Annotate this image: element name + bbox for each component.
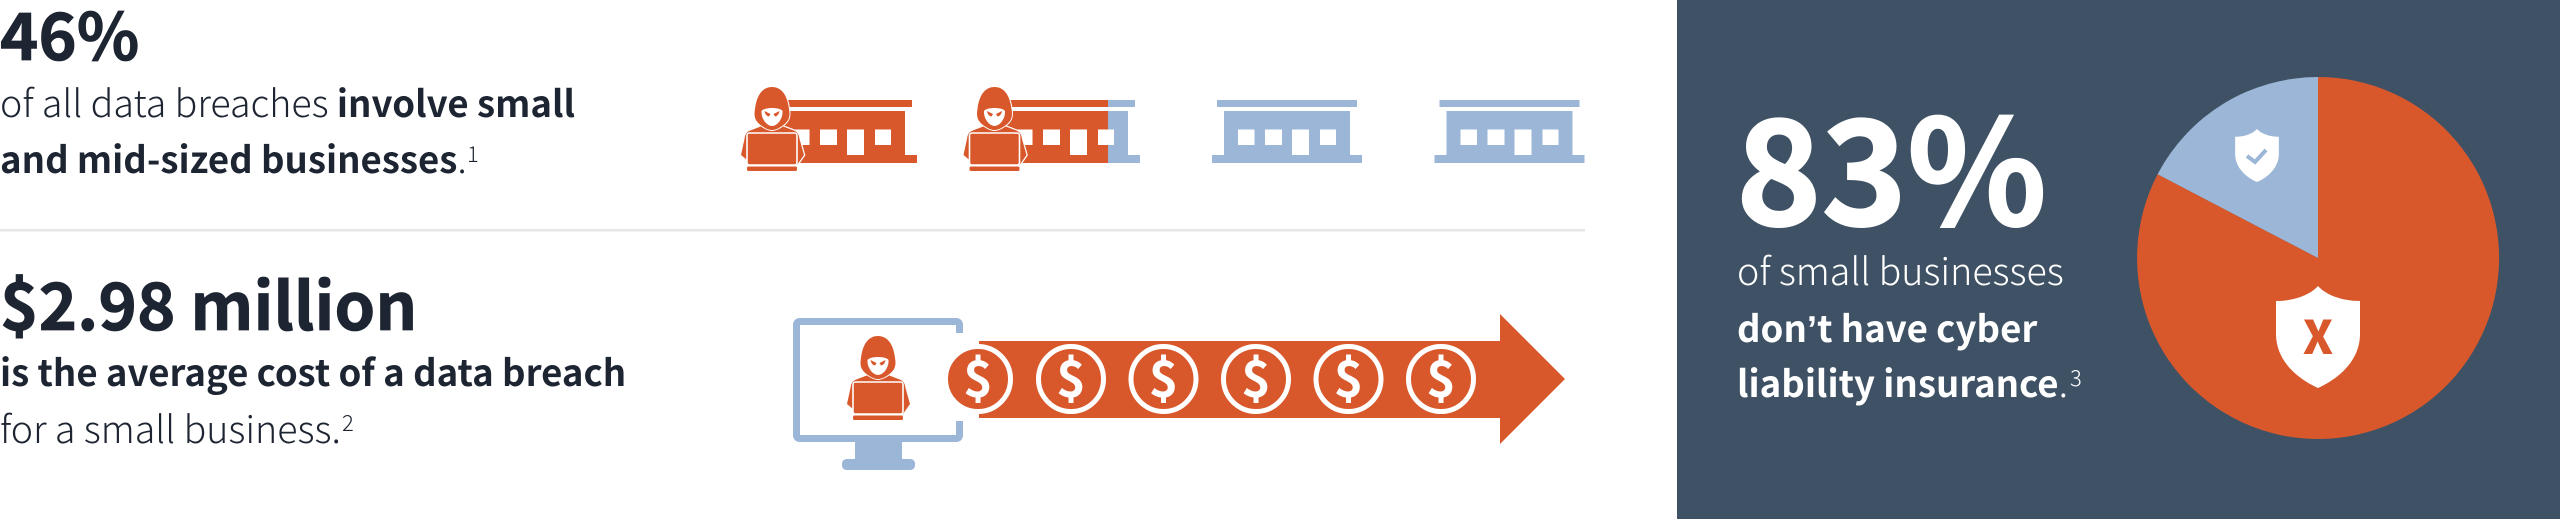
divider — [0, 229, 1585, 232]
text: small business: for a small business. — [0, 399, 341, 454]
coin 1: $ — [963, 340, 993, 412]
icon: shield with x — [2276, 286, 2360, 388]
pie slice: insured 17% — [2158, 77, 2318, 258]
coin 3 — [1131, 340, 1196, 412]
icon: hacker on screen — [847, 336, 910, 420]
icon: breached building 1 — [741, 87, 917, 171]
text: don't have cyber: don’t have cyber — [1737, 300, 2037, 353]
pie chart — [2137, 77, 2499, 439]
coin 4 — [1224, 340, 1288, 412]
text: liability insurance: liability insurance. — [1737, 353, 2068, 408]
coin 2 — [1038, 340, 1104, 412]
text: breach description: of all data breaches involve small — [0, 73, 575, 128]
coin 6: $ — [1426, 340, 1456, 412]
icon: shield with check — [2235, 129, 2279, 182]
coin 5: $ — [1334, 340, 1363, 412]
text: of small businesses: of small businesses — [1737, 241, 2064, 296]
heading: 83%: 83% — [1736, 57, 2047, 267]
text: breach description second line: and mid-sized businesses. — [0, 129, 467, 184]
arrow — [979, 314, 1565, 444]
footnote marker 3: 3 — [2070, 361, 2082, 393]
coin 3: $ — [1149, 340, 1178, 412]
icon: half breached building 2 — [964, 87, 1140, 171]
coin 6 — [1408, 340, 1474, 412]
icon: safe building 4 — [1434, 100, 1584, 163]
pie slice: uninsured 83% — [2137, 77, 2499, 439]
icon: computer monitor — [796, 322, 960, 470]
stat block: 46 percent — [0, 0, 575, 184]
icon row: four businesses — [741, 87, 1584, 171]
icon: shield with x: X — [2303, 302, 2333, 368]
text: average cost: is the average cost of a data breach — [0, 344, 626, 397]
icon: money flowing from hacked computer — [796, 314, 1565, 470]
footnote marker 2: 2 — [342, 406, 354, 438]
footnote marker 1: 1 — [467, 137, 479, 169]
icon: safe building 3 — [1212, 100, 1362, 163]
coin 4: $ — [1241, 340, 1271, 412]
coin 5 — [1316, 340, 1381, 412]
coin 2: $ — [1056, 340, 1086, 412]
coin 1 — [946, 340, 1010, 412]
heading: $2.98 million: $2.98 million — [0, 254, 417, 349]
panel: cyber liability insurance — [1677, 0, 2560, 519]
stat block: 2.98 million — [0, 254, 626, 454]
